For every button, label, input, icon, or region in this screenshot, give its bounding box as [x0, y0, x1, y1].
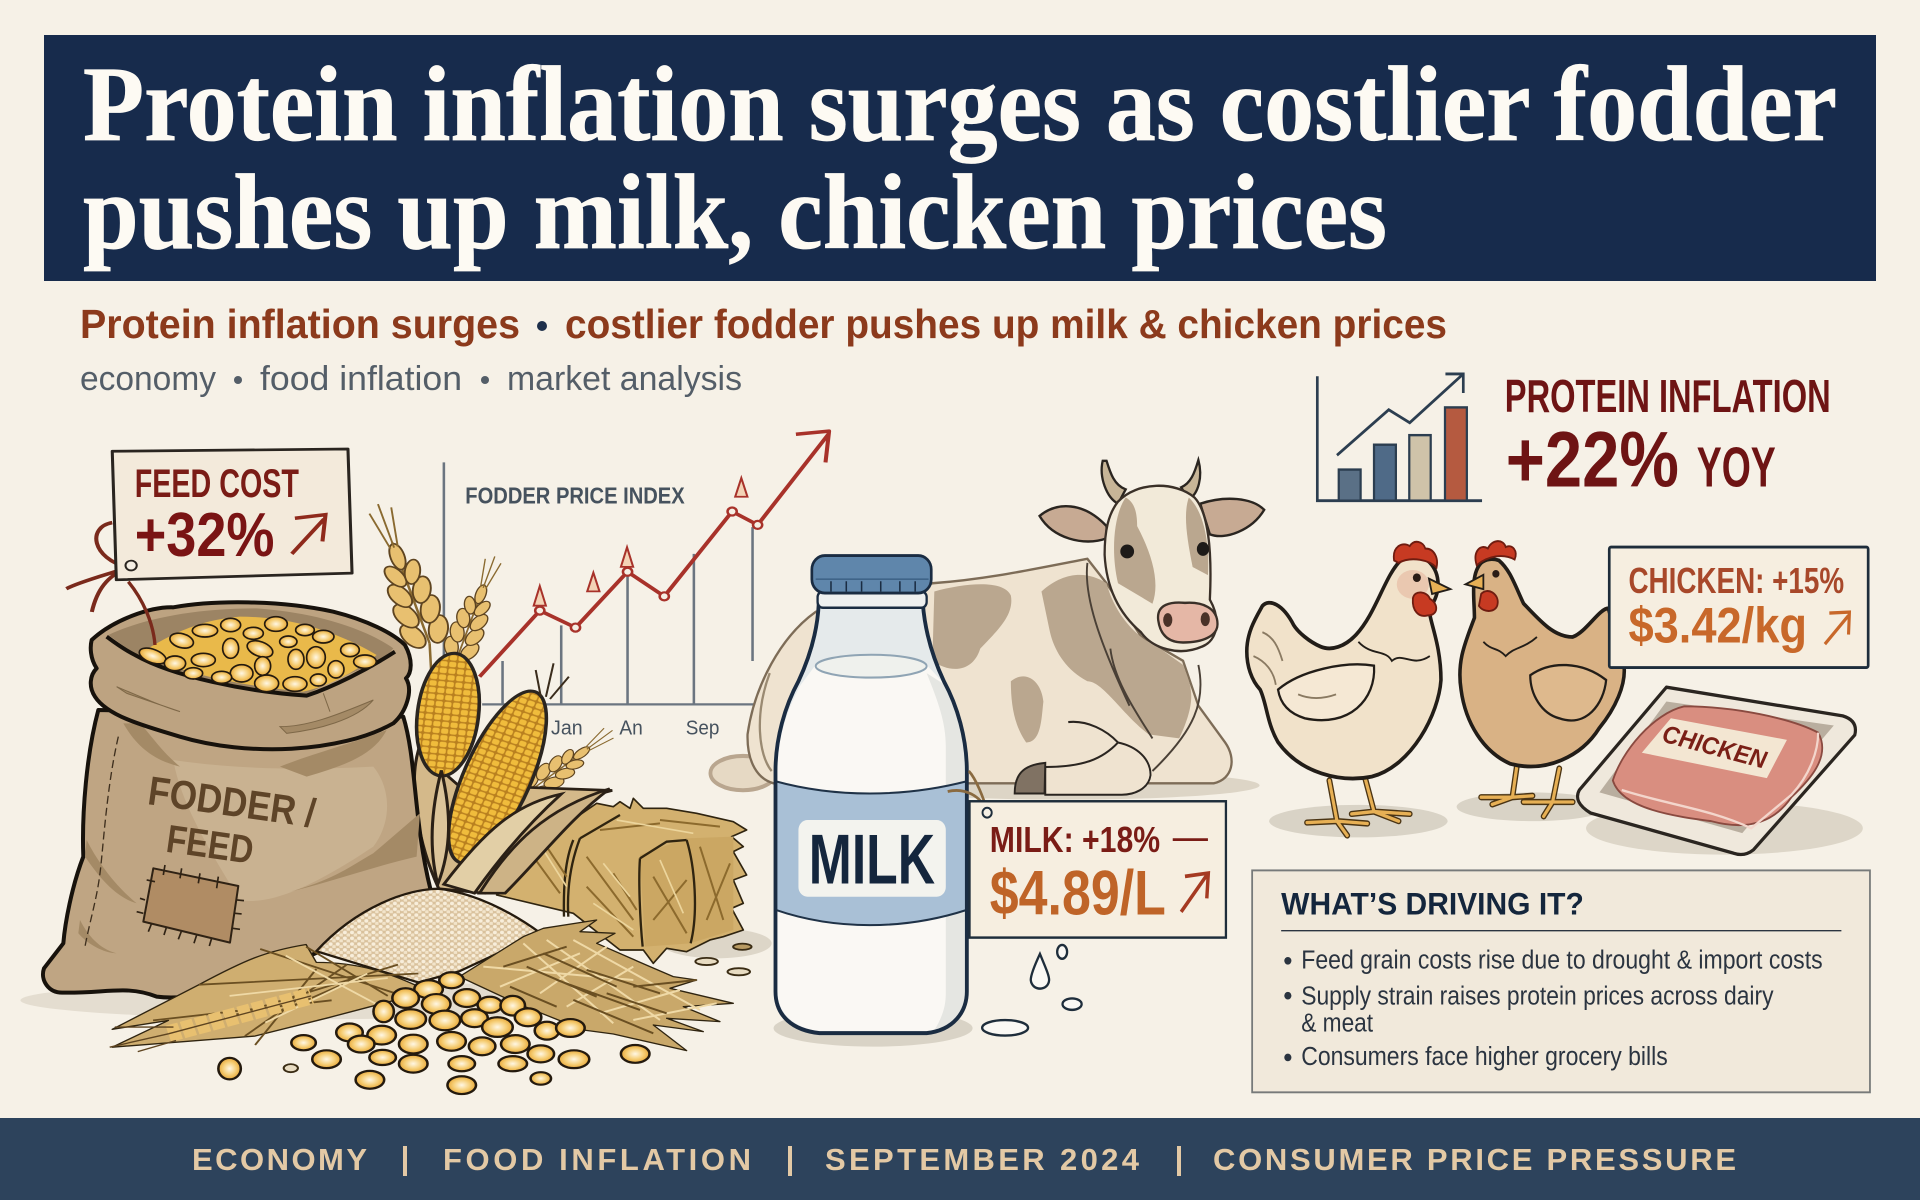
dairy illustration — [710, 460, 1264, 1047]
corn cobs — [410, 651, 612, 893]
protein inflation stat: +22% — [1506, 416, 1679, 504]
packaged chicken tray: CHICKEN — [1660, 720, 1770, 775]
topic tags line: food inflation — [260, 360, 462, 398]
milk price tag: $4.89/L — [990, 857, 1166, 928]
chicken price tag: CHICKEN: +15% — [1628, 561, 1844, 601]
subtitle: Protein inflation surges — [80, 301, 520, 347]
title — [83, 46, 1837, 272]
tan hen — [1457, 541, 1624, 821]
footer bar: SEPTEMBER 2024 — [825, 1142, 1140, 1177]
footer bar — [0, 1118, 1920, 1200]
fodder price index chart — [444, 431, 829, 739]
fodder price index chart: An — [619, 716, 643, 739]
burlap sack labelled fodder / feed: FEED — [164, 817, 256, 873]
feed cost price tag — [66, 449, 352, 612]
protein inflation stat: PROTEIN INFLATION — [1505, 372, 1831, 423]
panel: what's driving it: Feed grain costs rise due to drought & import costs — [1301, 946, 1823, 975]
panel: what's driving it: WHAT’S DRIVING IT? — [1281, 886, 1584, 922]
fodder price index chart: Sep — [686, 716, 719, 739]
right illustration: poultry, headline stat, drivers — [1247, 372, 1870, 1092]
milk bottle: MILK — [809, 820, 935, 899]
topic tags line: economy — [80, 360, 216, 398]
footer bar: ECONOMY — [192, 1142, 367, 1177]
loose seeds — [284, 944, 752, 1072]
panel: what's driving it: Supply strain raises protein prices across dairy — [1301, 982, 1774, 1011]
topic tags line — [80, 360, 742, 398]
topic tags line: market analysis — [507, 360, 742, 398]
packaged chicken tray — [1578, 687, 1863, 855]
cow — [710, 460, 1264, 800]
milk drops — [982, 945, 1082, 1036]
milk price tag: MILK: +18% — [990, 820, 1160, 860]
fodder price index chart: Jan — [551, 716, 583, 739]
milk bottle — [774, 556, 973, 1047]
title: pushes up milk, chicken prices — [83, 154, 1387, 272]
milk price tag — [948, 771, 1226, 938]
straw piles — [110, 920, 733, 1052]
burlap sack labelled fodder / feed — [43, 582, 431, 998]
footer bar: FOOD INFLATION — [443, 1142, 751, 1177]
subtitle — [80, 301, 1447, 347]
subtitle: costlier fodder pushes up milk & chicken prices — [565, 301, 1447, 347]
hay bale — [497, 798, 772, 963]
rising bar chart icon — [1317, 374, 1482, 501]
ground shadow — [20, 982, 633, 1019]
wheat stalks — [351, 496, 624, 805]
protein inflation stat — [1505, 372, 1831, 504]
title: Protein inflation surges as costlier fodder — [83, 46, 1837, 164]
corn kernel pile — [218, 972, 649, 1094]
feed cost price tag: FEED COST — [135, 461, 299, 506]
chicken price tag — [1609, 547, 1868, 668]
panel: what's driving it: & meat — [1301, 1009, 1373, 1038]
chicken price tag: $3.42/kg — [1628, 598, 1807, 654]
panel: what's driving it — [1252, 870, 1870, 1092]
footer bar: CONSUMER PRICE PRESSURE — [1213, 1142, 1736, 1177]
protein inflation stat: YOY — [1697, 436, 1776, 499]
grain mound — [316, 889, 541, 982]
fodder price index chart: FODDER PRICE INDEX — [465, 483, 685, 509]
header banner — [44, 35, 1876, 281]
burlap sack labelled fodder / feed: FODDER / — [145, 767, 318, 836]
left illustration: feed and fodder — [20, 431, 829, 1094]
panel: what's driving it: Consumers face higher grocery bills — [1301, 1042, 1668, 1071]
pale hen — [1247, 542, 1450, 837]
feed cost price tag: +32% — [135, 500, 274, 570]
